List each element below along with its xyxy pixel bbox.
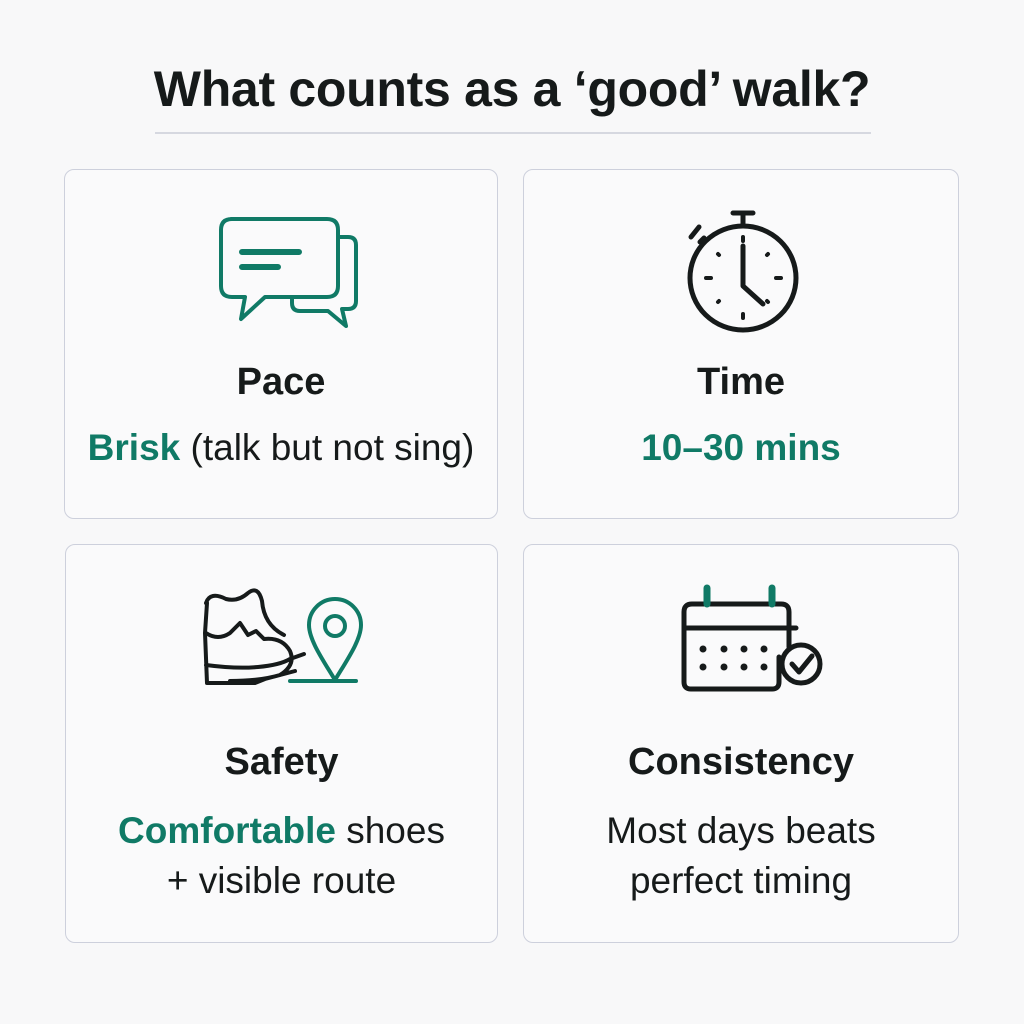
- text: safety: + visible route: [167, 860, 396, 901]
- icon: shoe and location pin: [205, 590, 361, 683]
- title: What counts as a ‘good’ walk?: [154, 61, 870, 117]
- text: pace: Brisk (talk but not sing): [88, 427, 474, 468]
- text: safety: [118, 810, 445, 901]
- text: consistency: Most days beats: [606, 810, 876, 851]
- text: consistency: perfect timing: [630, 860, 852, 901]
- panel: consistency: [523, 544, 959, 943]
- text: consistency: [606, 810, 876, 901]
- heading: safety: Safety: [224, 741, 339, 783]
- icon: stopwatch: [690, 213, 796, 330]
- icon: chat bubbles: [221, 219, 356, 326]
- text: time: 10–30 mins: [641, 427, 841, 468]
- heading: time: Time: [697, 361, 785, 403]
- heading: consistency: Consistency: [628, 741, 854, 783]
- icon: calendar with check: [684, 588, 820, 689]
- text: safety: Comfortable shoes: [118, 810, 445, 851]
- panel: safety: [65, 544, 498, 943]
- panel: pace: [64, 169, 498, 519]
- heading: pace: Pace: [237, 361, 325, 403]
- panel: time: [523, 169, 959, 519]
